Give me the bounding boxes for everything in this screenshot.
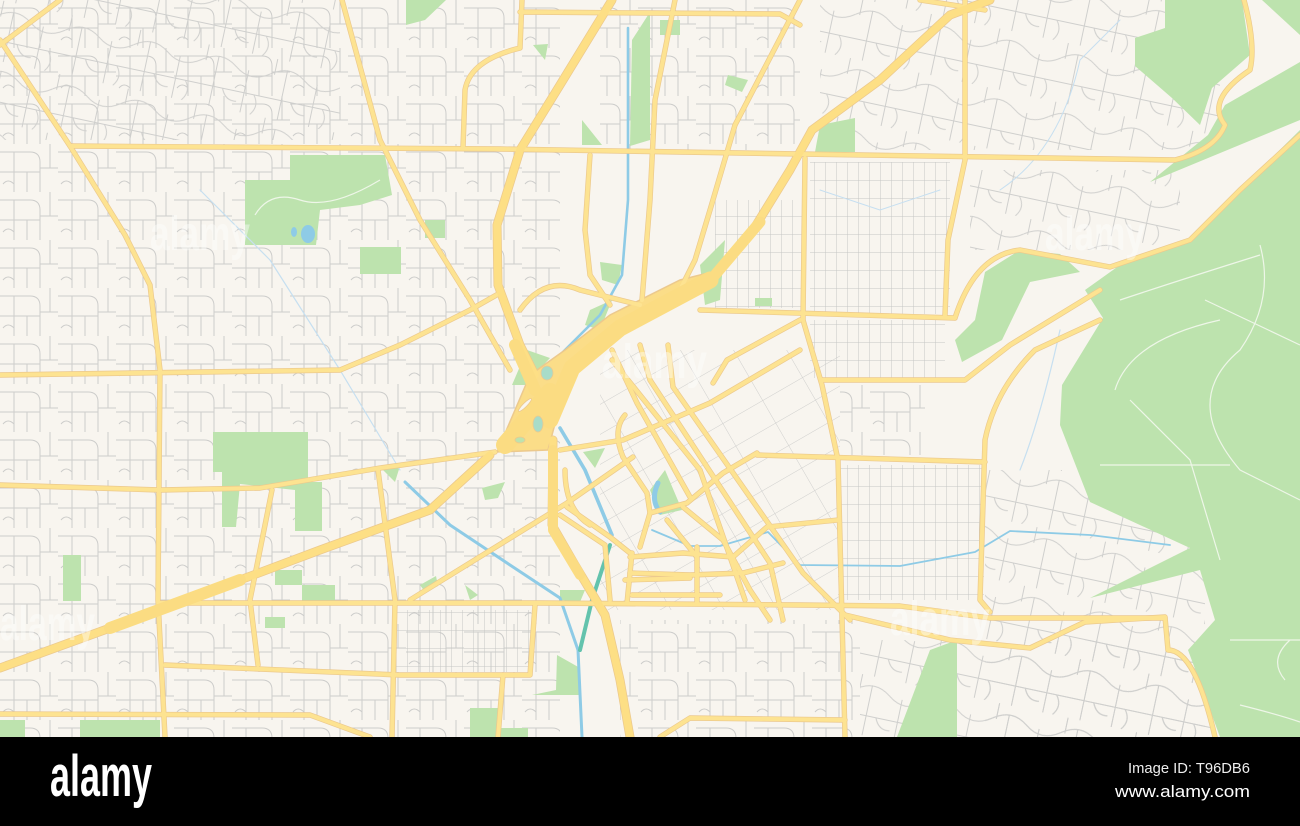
watermarks: alamy xyxy=(150,208,250,261)
water: rivers and canals xyxy=(200,20,1170,737)
watermarks: alamy xyxy=(890,593,990,646)
watermarks: alamy xyxy=(0,598,95,651)
image id: Image ID: T96DB6 xyxy=(1128,760,1250,777)
watermarks xyxy=(0,208,1145,651)
wide freeway segments xyxy=(110,222,760,628)
alamy logo: alamy xyxy=(50,744,152,809)
watermarks: alamy xyxy=(1045,208,1145,261)
footer bar xyxy=(0,737,1300,826)
website: www.alamy.com xyxy=(1114,782,1250,801)
park detail lines xyxy=(255,180,1300,722)
freeway interchange casing xyxy=(497,270,720,452)
interchange ramps islands xyxy=(515,366,553,443)
watermarks: alamy xyxy=(602,336,707,389)
